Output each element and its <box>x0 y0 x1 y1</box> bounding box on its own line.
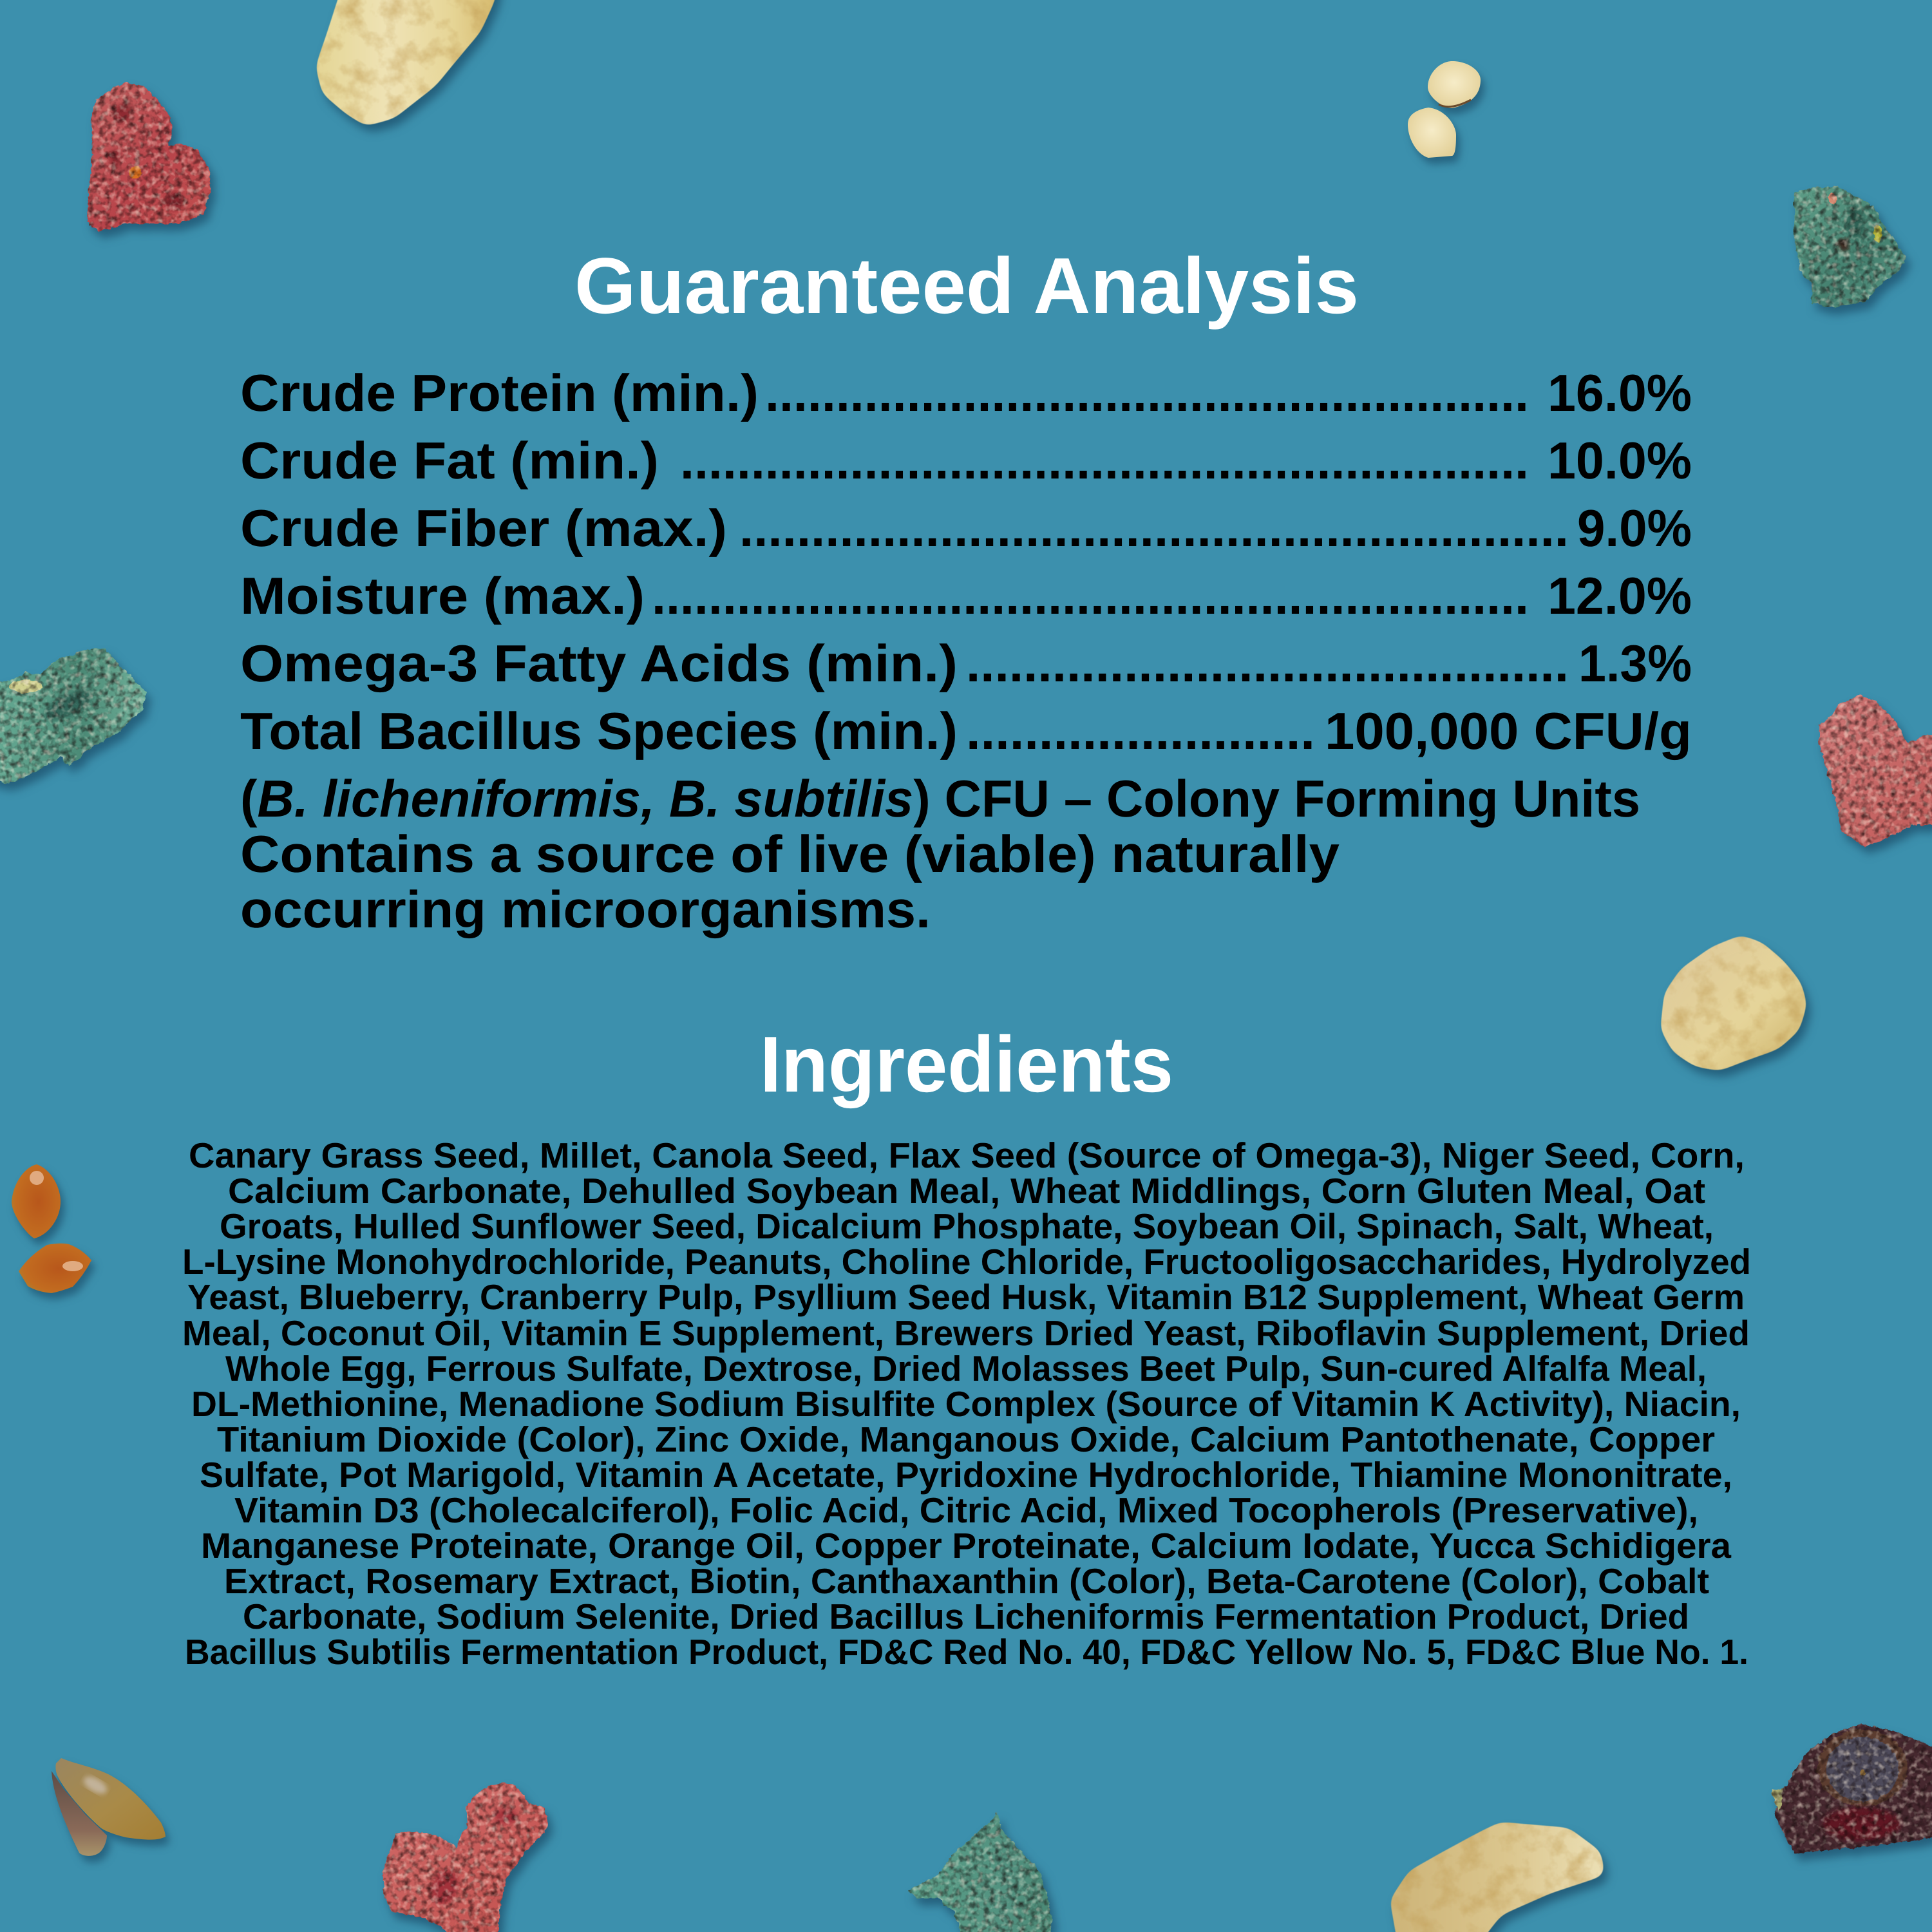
row: crude fiber: .......................................................... <box>739 500 1569 558</box>
text block: ingredient list: Yeast, Blueberry, Cranberry Pulp, Psyllium Seed Husk, Vitamin B12 Supplement, Wheat Germ <box>187 1277 1745 1317</box>
row: omega-3: Omega-3 Fatty Acids (min.) <box>240 635 958 693</box>
row: crude fat: Crude Fat (min.) <box>240 432 659 490</box>
row: omega-3: .......................................... <box>966 635 1569 693</box>
text block: ingredient list: Bacillus Subtilis Fermentation Product, FD&C Red No. 40, FD&C Yellow No. 5, FD&C Blue No. 1. <box>185 1632 1748 1672</box>
text block: ingredient list: Manganese Proteinate, Orange Oil, Copper Proteinate, Calcium Iodate, Yucca Schidigera <box>201 1526 1731 1566</box>
text block: ingredient list: Calcium Carbonate, Dehulled Soybean Meal, Wheat Middlings, Corn Gluten Meal, Oat <box>228 1171 1705 1211</box>
row: omega-3 <box>240 635 1692 693</box>
row: moisture: 12.0% <box>1548 567 1692 625</box>
icon: green kibble left edge <box>0 649 146 784</box>
text block: ingredient list: L-Lysine Monohydrochloride, Peanuts, Choline Chloride, Fructooligosaccharides, Hydrolyzed <box>182 1242 1751 1282</box>
row: crude protein <box>240 365 1692 422</box>
icon: green kibble bottom <box>909 1813 1052 1932</box>
note: bacillus species: (B. licheniformis, B. subtilis) CFU – Colony Forming Units <box>240 770 1640 828</box>
row: crude protein: 16.0% <box>1548 365 1692 422</box>
note: bacillus species: Contains a source of live (viable) naturally <box>240 826 1340 884</box>
icon: peanut top <box>316 0 499 126</box>
row: crude fiber: Crude Fiber (max.) <box>240 500 727 558</box>
icon: dried berry bottom right <box>1771 1724 1932 1853</box>
note: bacillus species: occurring microorganisms. <box>240 881 931 939</box>
text block: ingredient list: Canary Grass Seed, Millet, Canola Seed, Flax Seed (Source of Omega-3), Niger Seed, Corn, <box>189 1135 1745 1175</box>
row: total bacillus: 100,000 CFU/g <box>1325 703 1692 761</box>
icon: green kibble top right <box>1794 187 1906 308</box>
row: moisture: Moisture (max.) <box>240 567 645 625</box>
icon: flax seeds left <box>12 1164 91 1293</box>
row: crude fat: 10.0% <box>1548 432 1692 490</box>
icon: two pale seeds top right <box>1408 61 1481 158</box>
row: crude fiber <box>240 500 1692 558</box>
icon: red heart kibble bottom <box>383 1782 547 1932</box>
text block: ingredient list <box>182 1135 1751 1672</box>
text block: ingredient list: Groats, Hulled Sunflower Seed, Dicalcium Phosphate, Soybean Oil, Spinach, Salt, Wheat, <box>220 1206 1714 1246</box>
row: total bacillus: ........................ <box>966 703 1315 761</box>
row: moisture: .............................................................. <box>652 567 1529 625</box>
heading: ingredients: Ingredients <box>760 1021 1173 1109</box>
text block: ingredient list: Whole Egg, Ferrous Sulfate, Dextrose, Dried Molasses Beet Pulp, Sun-cured Alfalfa Meal, <box>225 1349 1707 1388</box>
row: total bacillus <box>240 703 1692 761</box>
text block: ingredient list: Sulfate, Pot Marigold, Vitamin A Acetate, Pyridoxine Hydrochloride, Thiamine Mononitrate, <box>200 1455 1732 1495</box>
text block: ingredient list: Carbonate, Sodium Selenite, Dried Bacillus Licheniformis Fermentation Product, Dried <box>243 1596 1689 1636</box>
icon: sunflower seed husk bottom left <box>52 1758 166 1856</box>
row: omega-3: 1.3% <box>1578 635 1692 693</box>
panel: ingredients <box>182 1021 1751 1672</box>
icon: tan kibble right <box>1660 935 1807 1071</box>
text block: ingredient list: Vitamin D3 (Cholecalciferol), Folic Acid, Citric Acid, Mixed Tocopherols (Preservative), <box>234 1490 1698 1530</box>
text block: ingredient list: DL-Methionine, Menadione Sodium Bisulfite Complex (Source of Vitamin K Activity), Niacin, <box>191 1384 1741 1424</box>
icon: red heart kibble top left <box>87 82 211 232</box>
row: crude protein: Crude Protein (min.) <box>240 365 759 422</box>
heading: guaranteed analysis: Guaranteed Analysis <box>574 242 1359 330</box>
text block: ingredient list: Meal, Coconut Oil, Vitamin E Supplement, Brewers Dried Yeast, Riboflavin Supplement, Dried <box>182 1313 1750 1353</box>
row: total bacillus: Total Bacillus Species (min.) <box>240 703 958 761</box>
row: moisture <box>240 567 1692 625</box>
icon: peanut bottom <box>1390 1822 1605 1932</box>
note: bacillus species <box>240 770 1640 939</box>
text block: ingredient list: Titanium Dioxide (Color), Zinc Oxide, Manganous Oxide, Calcium Pantothenate, Copper <box>217 1419 1715 1459</box>
text block: ingredient list: Extract, Rosemary Extract, Biotin, Canthaxanthin (Color), Beta-Carotene (Color), Cobalt <box>224 1561 1709 1601</box>
icon: red heart kibble right edge <box>1819 695 1932 847</box>
row: crude protein: ...................................................... <box>765 365 1529 422</box>
row: crude fat <box>240 432 1692 490</box>
row: crude fat: ............................................................ <box>680 432 1529 490</box>
panel: guaranteed analysis <box>240 242 1692 939</box>
row: crude fiber: 9.0% <box>1577 500 1692 558</box>
